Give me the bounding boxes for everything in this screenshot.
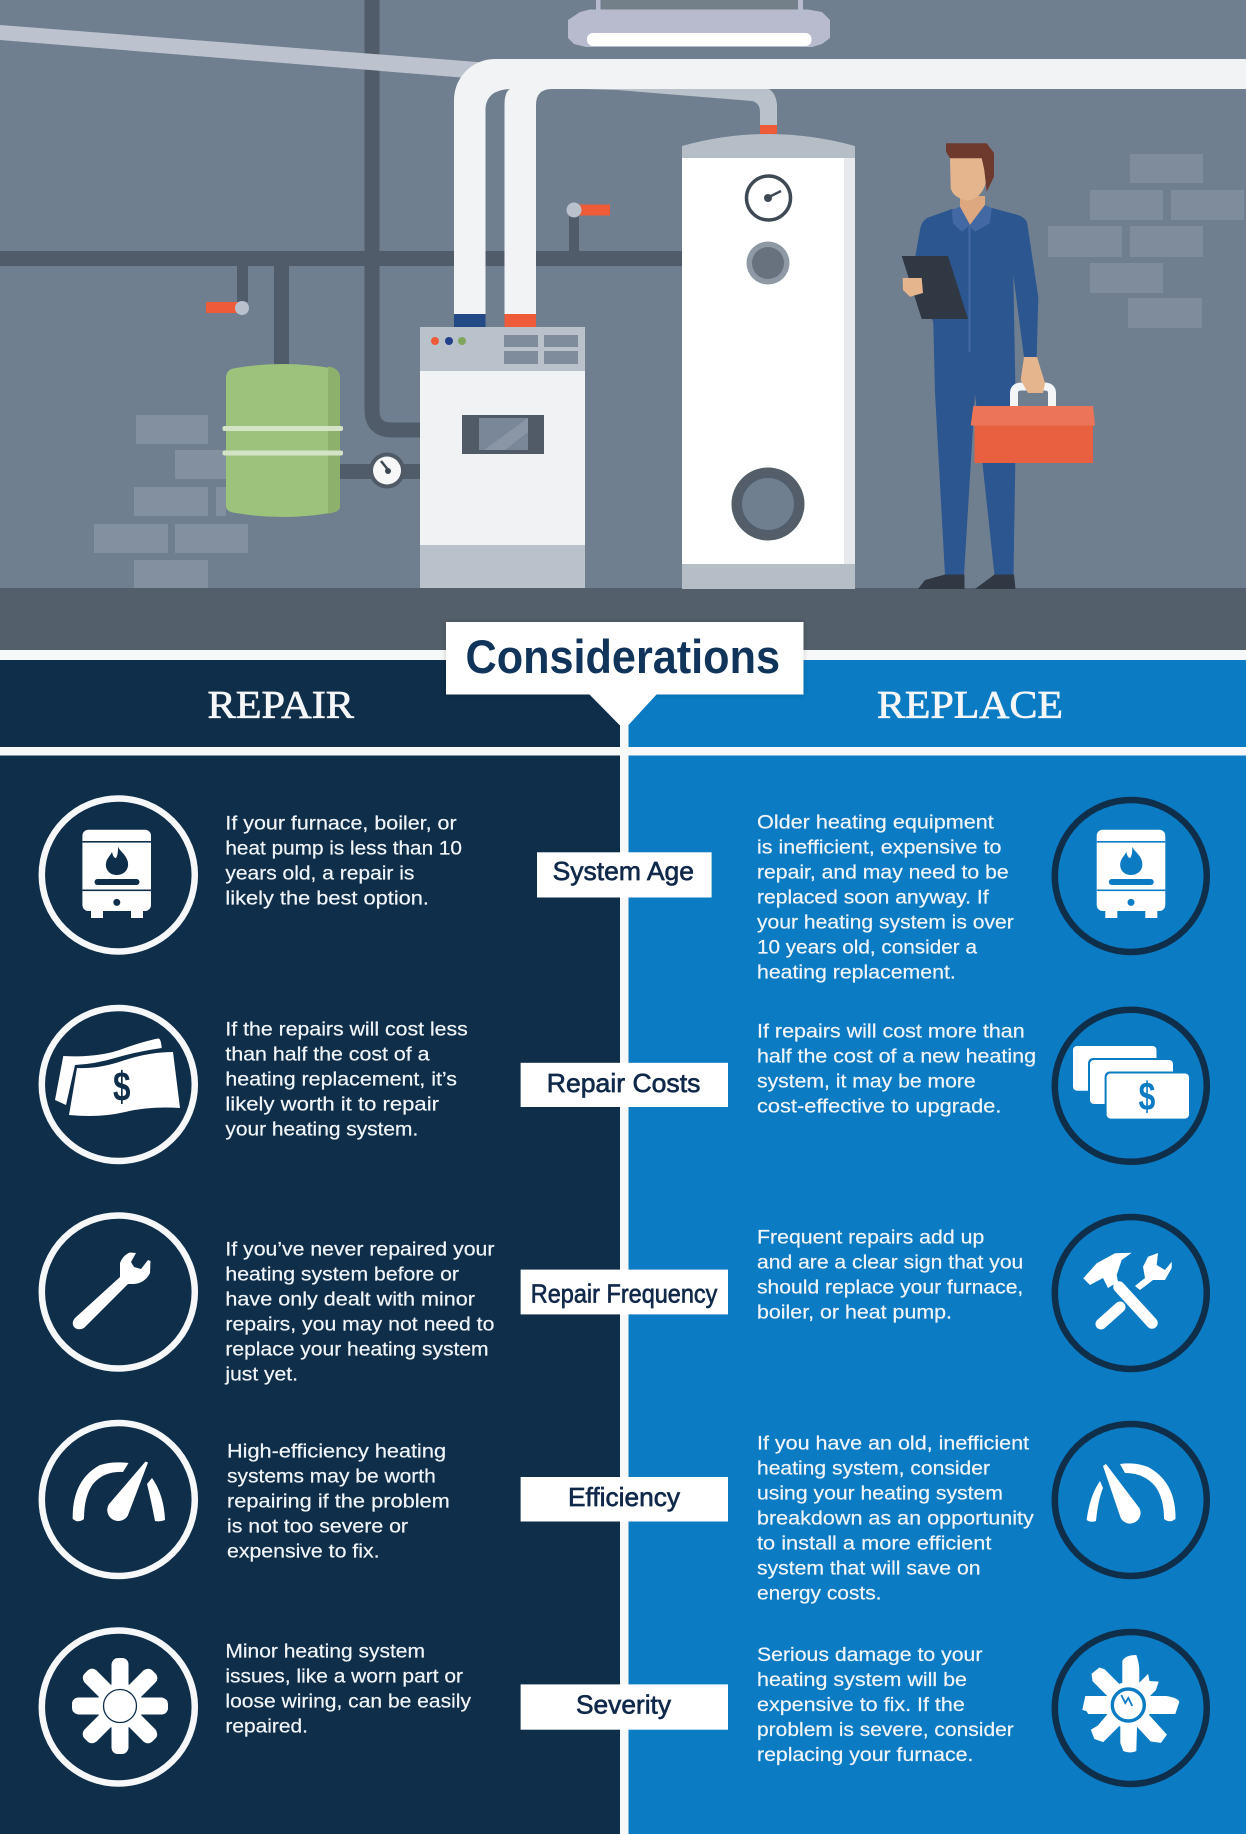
text: severity replace: replacing your furnace.	[757, 1745, 973, 1766]
text: severity repair: repaired.	[225, 1716, 308, 1738]
icon: cash stack replace	[1055, 1010, 1207, 1162]
text: repair frequency repair: replace your heating system	[225, 1340, 489, 1360]
duct collars	[454, 314, 536, 327]
icon: broken fan replace	[1055, 1632, 1207, 1784]
row 5: severity	[42, 1630, 1207, 1784]
collar	[952, 205, 992, 232]
text: repair costs repair: your heating system.	[225, 1120, 418, 1141]
text: efficiency repair: High-efficiency heating	[227, 1442, 446, 1462]
row 3: repair frequency	[42, 1216, 1207, 1386]
furnace	[420, 327, 585, 588]
text: repair system age	[225, 814, 462, 910]
text: replace system age: heating replacement.	[757, 962, 956, 984]
text: repair frequency repair: just yet.	[224, 1364, 298, 1386]
text: efficiency replace: If you have an old, inefficient	[757, 1434, 1030, 1454]
text: repair frequency replace	[757, 1228, 1023, 1324]
text: severity replace: expensive to fix. If the	[757, 1695, 965, 1716]
text: efficiency replace: system that will save on	[757, 1558, 980, 1580]
text: repair costs repair: If the repairs will cost less	[225, 1020, 468, 1041]
icon: furnace replace	[1055, 800, 1207, 952]
label: system age	[537, 852, 712, 898]
text: efficiency replace: to install a more efficient	[757, 1534, 992, 1554]
text: repair costs replace: cost-effective to upgrade.	[757, 1096, 1001, 1118]
hair	[946, 143, 994, 192]
label: efficiency: Efficiency	[568, 1482, 680, 1512]
text: repair frequency repair	[224, 1240, 495, 1386]
text: repair frequency replace: should replace your furnace,	[757, 1278, 1023, 1298]
panel: repair column	[0, 660, 620, 1834]
label: system age: System Age	[553, 856, 694, 886]
pressure gauge	[369, 452, 405, 488]
text: severity repair: issues, like a worn part or	[225, 1666, 464, 1688]
text: repair frequency repair: have only dealt with minor	[225, 1290, 476, 1310]
left hand	[903, 278, 923, 297]
label: repair frequency	[521, 1270, 728, 1314]
icon: furnace repair	[42, 798, 195, 952]
label: severity	[521, 1684, 728, 1730]
right valve	[566, 202, 610, 218]
icon: gauge replace	[1055, 1424, 1207, 1576]
suit	[915, 208, 1038, 575]
text: efficiency replace: energy costs.	[757, 1584, 882, 1604]
text: repair frequency replace: boiler, or heat pump.	[757, 1302, 952, 1324]
text: severity replace: problem is severe, consider	[757, 1720, 1015, 1741]
icon: fan repair	[42, 1630, 195, 1784]
text: efficiency replace: heating system, consider	[757, 1458, 991, 1480]
text: repair costs replace: half the cost of a new heating	[757, 1046, 1036, 1068]
bricks right	[1048, 154, 1244, 328]
left valve	[206, 301, 249, 315]
text: repair frequency replace: and are a clear sign that you	[757, 1252, 1023, 1274]
row 4: efficiency	[42, 1423, 1207, 1604]
thin pipe to water heater	[550, 88, 777, 126]
neck and head	[960, 196, 985, 225]
text: efficiency replace	[757, 1434, 1034, 1604]
white ducts	[454, 59, 1246, 314]
clipboard	[902, 256, 968, 319]
heater drain	[732, 468, 804, 540]
text: replace system age: is inefficient, expensive to	[757, 838, 1001, 858]
title: considerations callout	[446, 622, 804, 725]
text: repair costs repair: heating replacement, it’s	[225, 1070, 457, 1091]
icon: cash stack replace: $	[1139, 1075, 1156, 1119]
white band	[0, 650, 1246, 660]
row 1: system age	[42, 798, 1207, 984]
heading: repair: REPAIR	[208, 684, 354, 726]
label: efficiency	[521, 1477, 728, 1522]
text: replace system age: 10 years old, consider a	[757, 938, 977, 958]
bricks left	[94, 415, 248, 588]
text: efficiency repair: is not too severe or	[227, 1516, 409, 1538]
text: repair system age: If your furnace, boiler, or	[225, 814, 457, 835]
heading: replace: REPLACE	[877, 684, 1063, 726]
floor	[0, 588, 1246, 650]
text: severity repair: loose wiring, can be easily	[225, 1692, 472, 1712]
text: replace system age: repair, and may need to be	[757, 862, 1009, 884]
technician	[902, 143, 1095, 589]
text: repair frequency repair: heating system before or	[225, 1264, 460, 1286]
label: severity: Severity	[576, 1690, 671, 1720]
water heater tank	[682, 125, 855, 589]
text: efficiency replace: using your heating system	[757, 1484, 1003, 1504]
heater port	[746, 242, 790, 284]
icon: hammer and wrench	[1055, 1217, 1207, 1369]
text: efficiency repair	[227, 1442, 450, 1562]
text: replace system age: Older heating equipment	[757, 812, 995, 834]
text: repair costs replace: system, it may be more	[757, 1072, 976, 1092]
text: repair costs replace: If repairs will cost more than	[757, 1022, 1025, 1042]
text: severity replace	[757, 1645, 1015, 1766]
text: repair system age: years old, a repair is	[225, 864, 414, 885]
text: repair costs repair: than half the cost of a	[225, 1045, 430, 1066]
heater dial	[746, 176, 790, 220]
shoes	[918, 574, 1016, 589]
right hand	[1021, 357, 1045, 393]
text: repair frequency repair: If you’ve never repaired your	[225, 1240, 495, 1260]
icon: wrench	[42, 1216, 195, 1368]
row 2: repair costs	[42, 1008, 1207, 1162]
text: repair costs replace	[757, 1022, 1036, 1118]
label: repair costs: Repair Costs	[547, 1068, 700, 1098]
text: severity repair: Minor heating system	[225, 1642, 425, 1662]
ceiling light	[568, 0, 830, 47]
text: repair frequency replace: Frequent repairs add up	[757, 1228, 984, 1248]
text: repair costs repair: likely worth it to repair	[225, 1095, 440, 1116]
icon: cash repair	[42, 1008, 195, 1161]
diagonal ceiling beam	[0, 25, 490, 79]
text: efficiency repair: expensive to fix.	[227, 1542, 380, 1562]
text: severity replace: Serious damage to your	[757, 1645, 983, 1666]
text: efficiency repair: repairing if the problem	[227, 1492, 450, 1512]
text: repair costs repair	[225, 1020, 468, 1141]
text: replace system age: replaced soon anyway. If	[757, 888, 989, 908]
text: replace system age: your heating system is over	[757, 912, 1015, 934]
text: repair system age: heat pump is less than 10	[225, 839, 462, 860]
title: considerations callout: Considerations	[466, 630, 780, 683]
text: severity replace: heating system will be	[757, 1670, 967, 1691]
icon: gauge repair	[42, 1423, 195, 1576]
text: repair frequency repair: repairs, you may not need to	[225, 1314, 494, 1336]
label: repair costs	[521, 1063, 728, 1107]
icon: cash repair: $	[113, 1063, 131, 1110]
text: efficiency repair: systems may be worth	[227, 1466, 436, 1488]
text: efficiency replace: breakdown as an opportunity	[757, 1508, 1034, 1530]
dark wall pipes	[0, 0, 684, 479]
text: replace system age	[757, 812, 1015, 984]
text: severity repair	[225, 1642, 472, 1738]
toolbox	[971, 386, 1095, 463]
text: repair system age: likely the best option.	[225, 889, 429, 910]
expansion tank	[222, 364, 343, 517]
label: repair frequency: Repair Frequency	[531, 1278, 717, 1308]
panel: replace column	[628, 660, 1246, 1834]
